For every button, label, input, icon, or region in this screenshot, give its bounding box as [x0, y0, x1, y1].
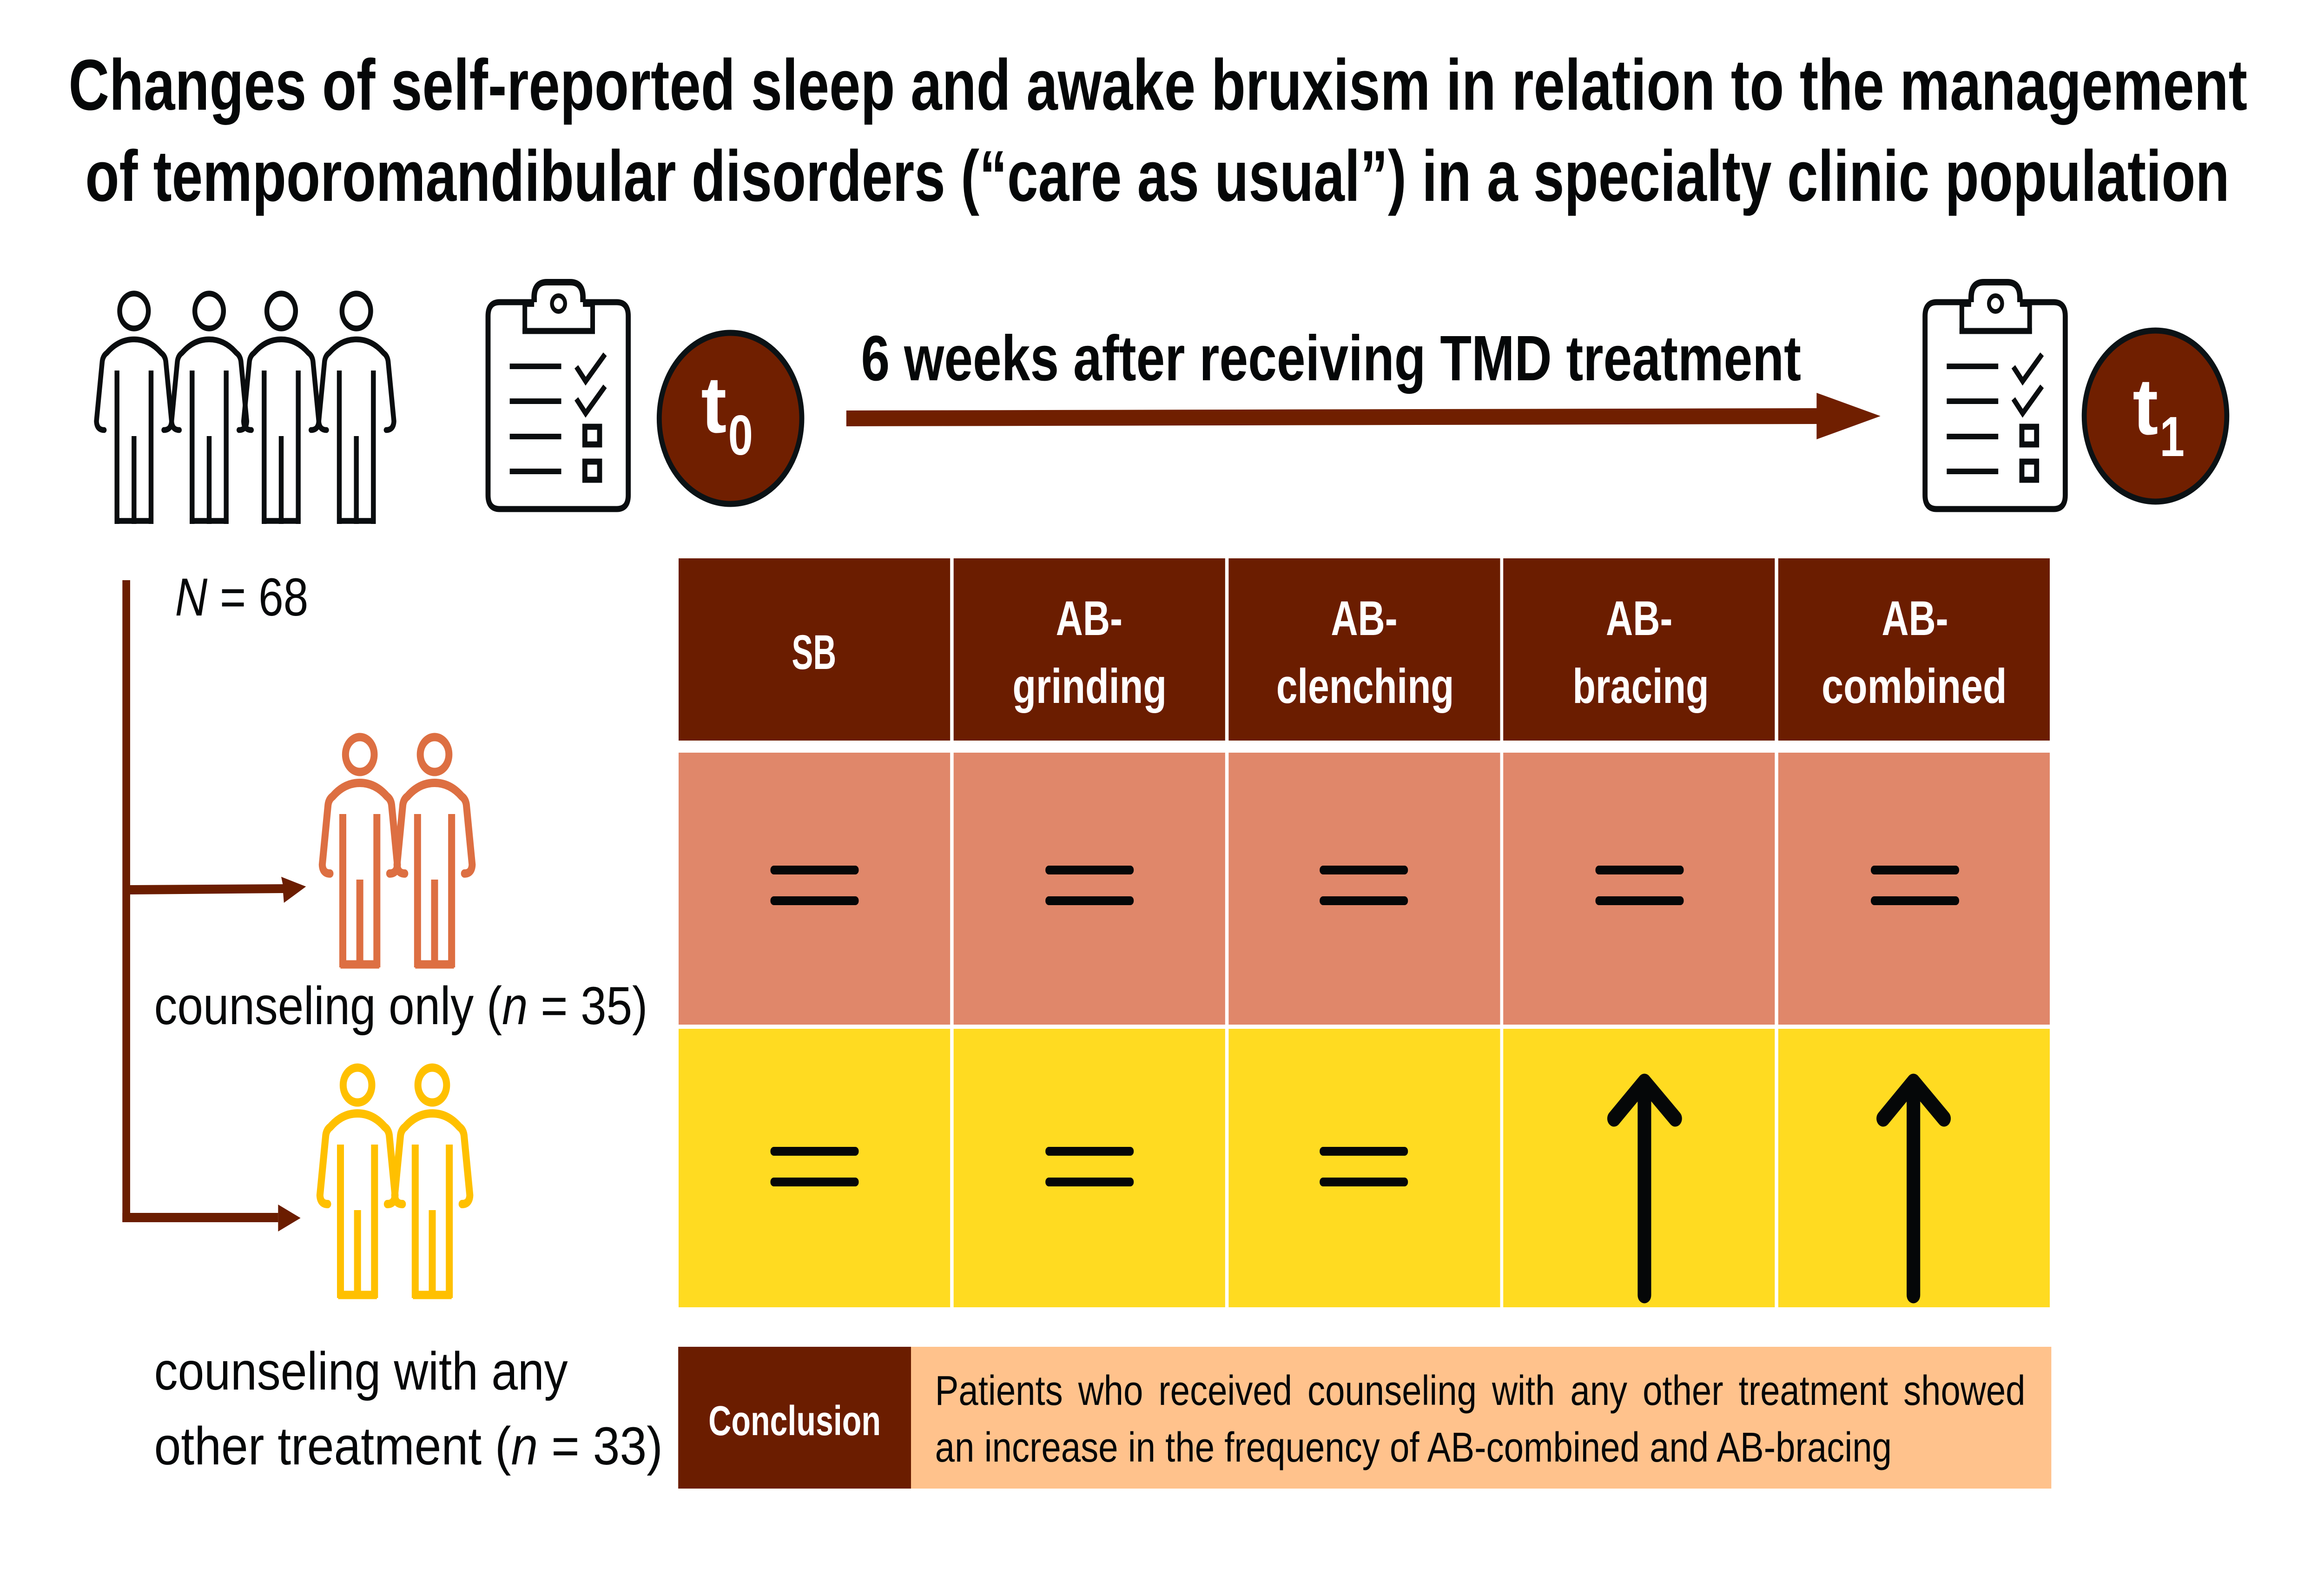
header: AB-combined: combined [1822, 660, 2007, 714]
table row: counseling only, no change [679, 753, 2050, 1025]
label: counseling with any other treatment: other treatment ( n = 33) [154, 1417, 663, 1476]
table row: counseling with other treatment [679, 1029, 2050, 1307]
badge: t1 [2084, 331, 2227, 502]
title: Changes of self-reported sleep and awake bruxism in relation to the management [69, 45, 2247, 126]
arrow: t0 to t1 [846, 393, 1881, 439]
conclusion label [678, 1347, 911, 1489]
icon: counseling with other treatment group [320, 1067, 470, 1298]
icon: up arrow, AB-bracing [1614, 1082, 1675, 1295]
header: AB-bracing: bracing [1572, 660, 1709, 714]
conclusion label: Conclusion [708, 1397, 881, 1444]
header: AB-clenching [1228, 558, 1500, 741]
header: AB-clenching: clenching [1276, 660, 1454, 714]
badge: t0: t [701, 360, 726, 450]
conclusion text [911, 1347, 2051, 1489]
icon: counseling only group [322, 737, 472, 967]
header: AB-combined: AB- [1882, 592, 1948, 646]
conclusion text: Patients who received counseling with any other treatment showed [935, 1367, 2026, 1414]
conclusion text: an increase in the frequency of AB-combined and AB-bracing [935, 1424, 1892, 1471]
header: SB: SB [792, 626, 836, 680]
badge: t0: 0 [728, 403, 753, 467]
label: counseling only: counseling only ( n = 35) [154, 976, 647, 1036]
header: AB-grinding: AB- [1056, 592, 1122, 646]
icon: clipboard at t1 [1925, 282, 2065, 509]
flow lines: allocation to groups [122, 580, 306, 1231]
title [69, 45, 2247, 217]
header: AB-combined [1778, 558, 2050, 741]
badge: t1: t [2133, 362, 2158, 451]
header: AB-grinding [954, 558, 1225, 741]
icon: clipboard at t0 [488, 282, 628, 509]
sample size label: N = 68 [175, 568, 308, 627]
conclusion [678, 1347, 2051, 1489]
icon: up arrow, AB-combined [1883, 1082, 1944, 1295]
label: counseling with any other treatment [154, 1342, 663, 1476]
badge: t1: 1 [2160, 404, 2185, 468]
icon: study population of four people [97, 294, 394, 524]
header: AB-grinding: grinding [1012, 660, 1167, 714]
header: AB-clenching: AB- [1331, 592, 1398, 646]
table header row [679, 558, 2050, 741]
header: AB-bracing: AB- [1606, 592, 1672, 646]
label: counseling with any other treatment: counseling with any [154, 1342, 568, 1401]
badge: t0 [659, 333, 802, 504]
arrow label: follow-up interval: 6 weeks after receiving TMD treatment [861, 322, 1801, 394]
header: SB [679, 558, 950, 741]
header: AB-bracing [1503, 558, 1775, 741]
